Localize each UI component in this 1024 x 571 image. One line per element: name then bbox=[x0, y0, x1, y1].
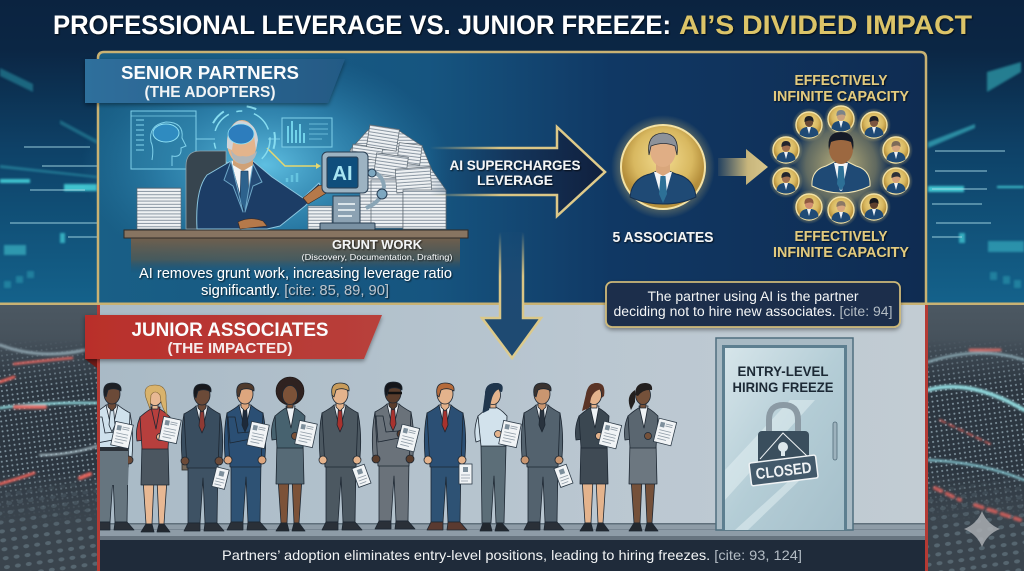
desk bbox=[124, 230, 468, 274]
door sign text: HIRING FREEZE bbox=[732, 379, 834, 395]
arrow: AI supercharges leverage: LEVERAGE bbox=[477, 172, 553, 188]
line of associates bbox=[91, 377, 677, 532]
callout: partner decision: deciding not to hire new associates. [cite: 94] bbox=[614, 304, 892, 319]
robot: AI terminal bbox=[320, 152, 387, 230]
grunt work label: GRUNT WORK bbox=[332, 238, 422, 252]
label: infinite capacity top: INFINITE CAPACITY bbox=[773, 89, 909, 105]
screen: brain scan bbox=[131, 111, 196, 169]
panel: senior partners bbox=[80, 50, 926, 303]
associate 12 bbox=[624, 383, 677, 531]
background: top digital band bbox=[0, 0, 1024, 304]
grunt work label bbox=[302, 238, 453, 262]
icon: associate cluster bbox=[769, 102, 913, 227]
grunt work label: (Discovery, Documentation, Drafting) bbox=[302, 252, 453, 262]
banner: junior associates: (THE IMPACTED) bbox=[168, 340, 292, 357]
banner: junior associates bbox=[85, 315, 382, 368]
paper stacks: right bbox=[308, 125, 446, 229]
associate 7 bbox=[372, 382, 420, 529]
banner: senior partners bbox=[85, 59, 345, 103]
icon: padlock bbox=[758, 405, 809, 465]
label: 5 associates: 5 ASSOCIATES bbox=[612, 230, 714, 246]
associate 9 bbox=[475, 383, 521, 531]
panel: junior associates bbox=[91, 305, 928, 571]
sign: closed: CLOSED bbox=[755, 460, 813, 483]
banner: senior partners: SENIOR PARTNERS bbox=[121, 63, 299, 83]
arrow: AI supercharges leverage: AI SUPERCHARGES bbox=[450, 157, 580, 173]
associate 6 bbox=[319, 383, 371, 530]
title: PROFESSIONAL LEVERAGE VS. JUNIOR FREEZE: bbox=[53, 10, 671, 40]
label: infinite capacity bottom: EFFECTIVELY bbox=[794, 229, 888, 245]
banner: junior associates: JUNIOR ASSOCIATES bbox=[132, 320, 328, 341]
senior panel caption bbox=[139, 266, 452, 299]
icon: partner medallion bbox=[611, 115, 715, 219]
arrow: small gold bbox=[718, 149, 768, 185]
label: infinite capacity bottom bbox=[773, 229, 909, 261]
background: lower data-wave left bbox=[0, 305, 97, 571]
arrow: downward impact bbox=[482, 232, 541, 358]
associate 8 bbox=[424, 383, 472, 530]
title: AI’S DIVIDED IMPACT bbox=[679, 10, 973, 40]
banner: senior partners: (THE ADOPTERS) bbox=[144, 84, 276, 101]
associate 3 bbox=[181, 384, 229, 531]
partner figure bbox=[197, 120, 330, 229]
associate 1 bbox=[100, 382, 134, 530]
associate 4 bbox=[224, 383, 269, 530]
label: infinite capacity top bbox=[773, 73, 909, 105]
door sign text bbox=[732, 363, 834, 395]
senior panel caption: AI removes grunt work, increasing leverage ratio bbox=[139, 266, 452, 282]
associate 2 bbox=[136, 385, 181, 532]
connector lines bbox=[196, 106, 321, 172]
senior panel caption: significantly. [cite: 85, 89, 90] bbox=[201, 283, 389, 299]
door: entry-level hiring freeze bbox=[716, 338, 853, 530]
door sign text: ENTRY-LEVEL bbox=[738, 363, 829, 379]
divider: gold line bbox=[0, 302, 1024, 305]
bottom caption bar: Partners’ adoption eliminates entry-level positions, leading to hiring freezes. [cite: 93, 124] bbox=[222, 547, 802, 563]
arrow: AI supercharges leverage bbox=[430, 127, 605, 216]
paper stack: left bbox=[137, 188, 181, 229]
icon: sparkle bbox=[964, 511, 1000, 547]
chair bbox=[186, 151, 226, 229]
label: infinite capacity bottom: INFINITE CAPACITY bbox=[773, 245, 909, 261]
associate 11 bbox=[575, 383, 622, 531]
callout: partner decision: The partner using AI is the partner bbox=[648, 289, 859, 304]
associate 5 bbox=[271, 377, 317, 531]
label: AI: AI bbox=[332, 163, 352, 185]
callout: partner decision bbox=[606, 282, 900, 327]
label: infinite capacity top: EFFECTIVELY bbox=[794, 73, 888, 89]
screen: bar chart bbox=[282, 118, 332, 182]
background: lower data-wave right bbox=[927, 305, 1024, 571]
associate 10 bbox=[521, 383, 573, 530]
bottom caption bar bbox=[97, 540, 928, 571]
